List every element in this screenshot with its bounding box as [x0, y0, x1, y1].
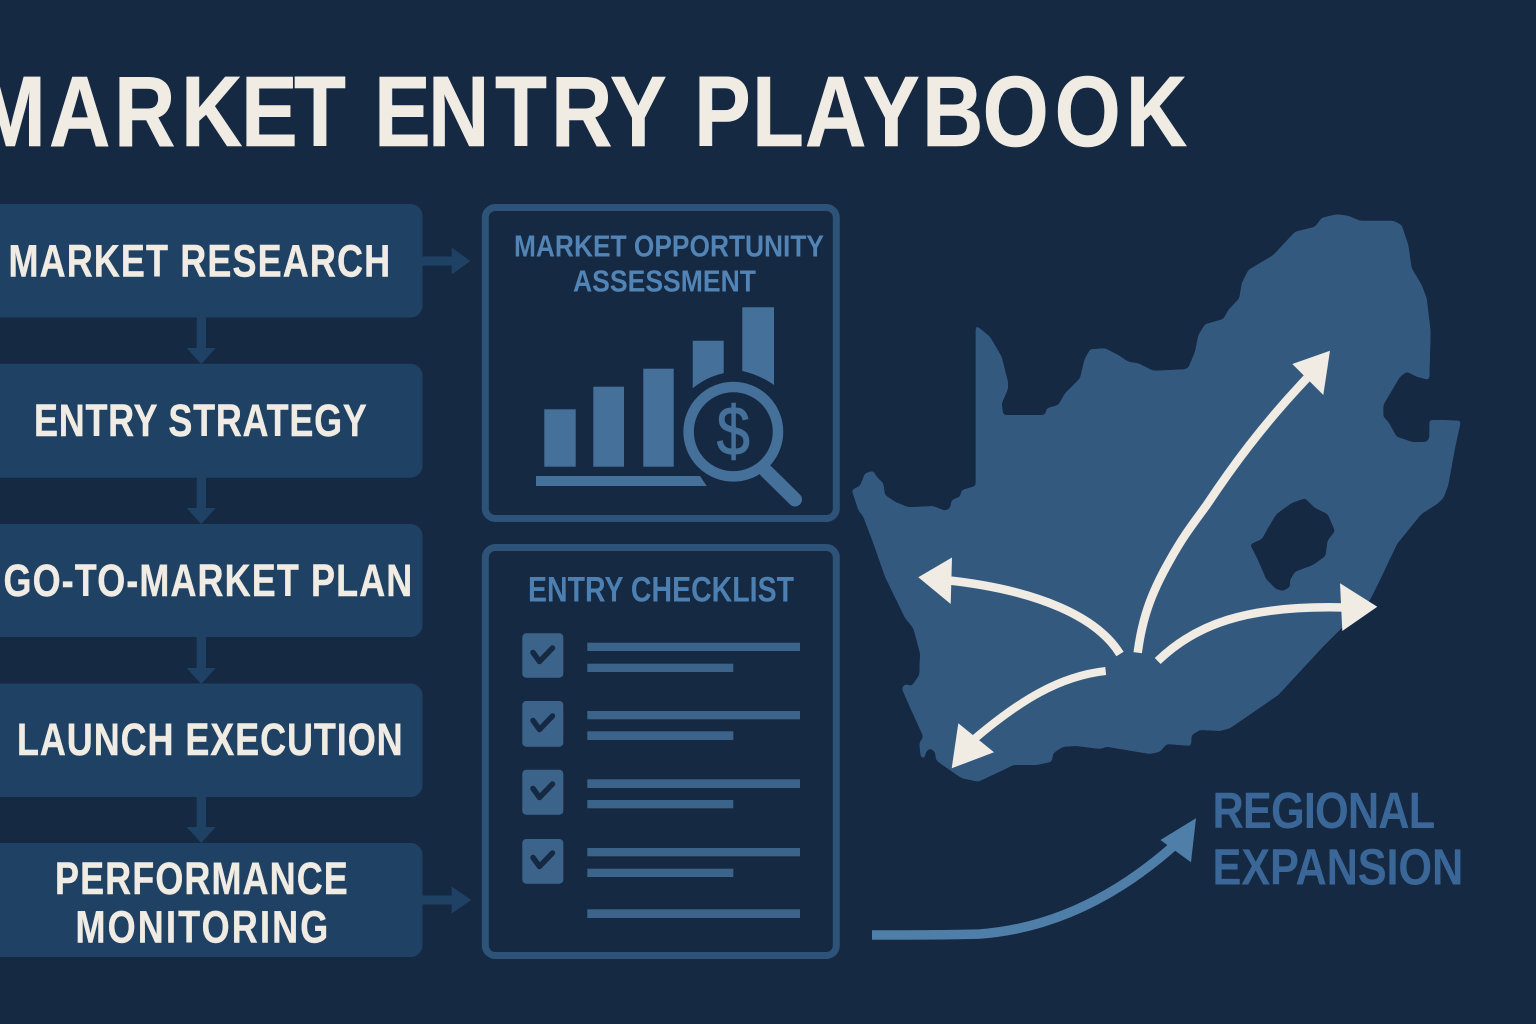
- icon: magnifying glass with dollar sign: [689, 387, 795, 500]
- icon: magnifying glass with dollar sign: $: [717, 391, 750, 470]
- arrow: monitoring to checklist: [420, 886, 471, 914]
- title: ENTRY: [374, 55, 667, 168]
- arrows: expansion routes on map: [918, 351, 1377, 768]
- step: market research: MARKET RESEARCH: [8, 236, 390, 287]
- step: launch execution: LAUNCH EXECUTION: [17, 714, 403, 765]
- connector arrows between steps: [187, 316, 216, 843]
- panel heading: [514, 229, 824, 299]
- step: performance monitoring: PERFORMANCE: [55, 853, 348, 904]
- arrow: west route: [918, 558, 1120, 654]
- map: South Africa: [852, 214, 1461, 782]
- step: market research: [0, 204, 422, 318]
- label: regional expansion: EXPANSION: [1212, 839, 1463, 896]
- checklist item 2: [522, 701, 800, 747]
- panel heading: MARKET OPPORTUNITY: [514, 229, 824, 264]
- arrow: research to assessment: [420, 248, 470, 274]
- checklist trailing line: [587, 909, 800, 918]
- step: entry strategy: [0, 364, 422, 478]
- checklist item 1: [522, 633, 800, 678]
- arrow: north-east route: [1138, 351, 1330, 653]
- panel: market opportunity assessment: [485, 208, 836, 518]
- step: launch execution: [0, 684, 422, 797]
- arrow: east route: [1158, 583, 1377, 661]
- step: performance monitoring: MONITORING: [76, 902, 328, 953]
- panel heading: ENTRY CHECKLIST: [528, 571, 794, 610]
- step: entry strategy: ENTRY STRATEGY: [34, 395, 367, 446]
- step: performance monitoring: [0, 843, 422, 957]
- panel heading: ASSESSMENT: [573, 264, 756, 299]
- title: PLAYBOOK: [694, 55, 1187, 168]
- checklist item 4: [522, 839, 800, 884]
- arrow: regional expansion curve: [872, 818, 1196, 935]
- bar chart: [536, 307, 774, 486]
- arrow: south-west route: [952, 671, 1106, 768]
- panel: process steps: [0, 204, 471, 957]
- label: regional expansion: [1212, 783, 1463, 896]
- step: go-to-market plan: [0, 524, 422, 637]
- panel: entry checklist: [485, 548, 836, 956]
- label: regional expansion: REGIONAL: [1212, 783, 1435, 840]
- title: [0, 55, 1187, 168]
- checklist item 3: [522, 770, 800, 815]
- step: go-to-market plan: GO-TO-MARKET PLAN: [4, 555, 412, 606]
